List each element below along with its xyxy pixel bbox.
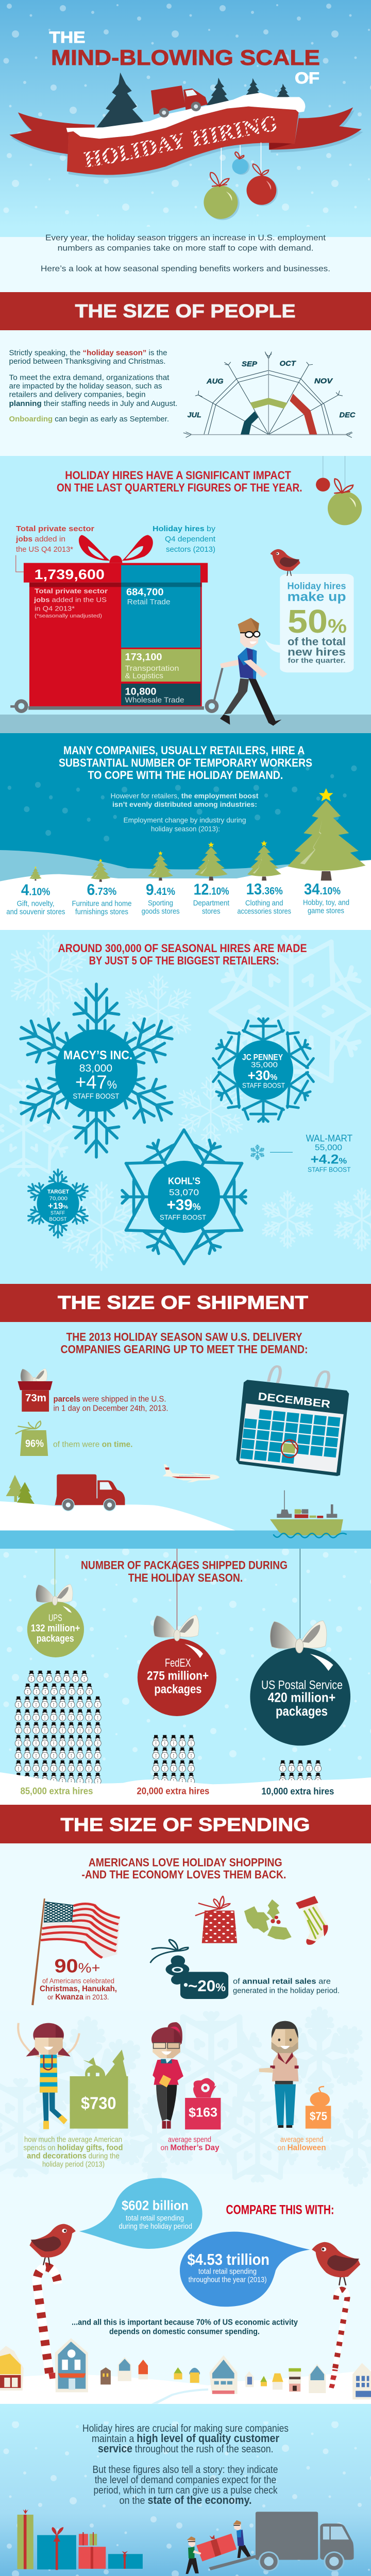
retailer: Macy's xyxy=(10,984,182,1157)
callout text: holiday hires by sector xyxy=(153,524,216,554)
callout text: holiday hires by sector: sectors (2013) xyxy=(166,545,215,554)
caption: Mother's Day: on Mother’s Day xyxy=(161,2143,220,2152)
baubles xyxy=(316,456,362,525)
text block: season definition: Strictly speaking, the “holiday season” is the xyxy=(9,349,167,357)
section banner: the size of people: THE SIZE OF PEOPLE xyxy=(75,300,296,321)
caption: Mother's Day xyxy=(161,2136,220,2152)
industry labels: stores xyxy=(202,907,221,916)
house: blue right xyxy=(352,2363,371,2399)
heading: SUBSTANTIAL NUMBER OF TEMPORARY WORKERS xyxy=(59,756,312,769)
ornament: US Postal Service: packages xyxy=(276,1703,328,1719)
snow ground xyxy=(0,1772,371,1805)
heading: BY JUST 5 OF THE BIGGEST RETAILERS: xyxy=(89,954,279,967)
text block: season definition: are impacted by the holiday season, such as xyxy=(9,382,162,391)
title xyxy=(49,28,320,87)
retailer: JC Penney xyxy=(209,1019,318,1122)
retailer: Kohl's: STAFF BOOST xyxy=(160,1213,206,1221)
industry labels: game stores xyxy=(308,907,344,916)
callout: 50 percent: Holiday hires xyxy=(288,581,346,591)
closing text: maintain a high level of quality customer xyxy=(92,2432,279,2445)
stat: total jobs: Total private sector xyxy=(35,587,108,595)
spend values: $163 xyxy=(189,2105,217,2120)
heading xyxy=(58,942,307,967)
stat: total jobs: jobs added in the US xyxy=(33,596,107,604)
speech bubble xyxy=(265,574,354,672)
retailer: JC Penney: 35,000 xyxy=(251,1061,278,1070)
industry labels: Hobby, toy, and xyxy=(303,899,349,907)
percent labels: 13.36% xyxy=(246,880,283,898)
stat: transportation: 173,100 xyxy=(125,652,162,663)
icon: polka dot gift xyxy=(195,1896,237,1943)
house: blue shop xyxy=(55,2338,88,2392)
snow ground xyxy=(0,860,371,930)
green trees xyxy=(6,1475,35,1511)
icon: green shopping bag xyxy=(15,1421,48,1456)
stat: transportation: & Logistics xyxy=(125,672,163,681)
text: on time: of them were on time. xyxy=(53,1440,133,1449)
illustration: ribbon, trees, truck and baubles xyxy=(9,73,363,220)
retailer: Kohl's: +39% xyxy=(167,1196,201,1213)
callout text: total jobs: jobs added in xyxy=(15,535,65,544)
heading xyxy=(57,469,302,494)
panel: average spending people xyxy=(0,2009,371,2184)
retailer: JC Penney: JC PENNEY xyxy=(242,1053,283,1062)
callout: 50 percent: 50% xyxy=(288,603,347,640)
heading: AMERICANS LOVE HOLIDAY SHOPPING xyxy=(89,1856,282,1869)
text block: season definition: To meet the extra demand, organizations that xyxy=(9,374,169,382)
scene: snowy village xyxy=(0,2338,371,2404)
retailer: Macy's: 83,000 xyxy=(79,1063,112,1074)
snow dots xyxy=(8,751,357,841)
panel: delivery companies xyxy=(0,1322,371,1549)
percent labels: 34.10% xyxy=(304,880,341,898)
panel: holiday season timeline xyxy=(0,330,371,456)
closing text: period, which in turn can give us a pulse check xyxy=(94,2485,278,2496)
snow ground xyxy=(0,2370,371,2404)
houses: right row xyxy=(245,2364,326,2393)
retailer: Target: TARGET xyxy=(47,1189,69,1195)
callout text: holiday hires by sector: Q4 dependent xyxy=(165,535,216,544)
stat: total jobs: in Q4 2013* xyxy=(35,605,75,613)
back hill xyxy=(0,850,371,883)
caption: holiday spend: spends on holiday gifts, food xyxy=(24,2143,123,2152)
truck xyxy=(55,1475,125,1511)
heading: ON THE LAST QUARTERLY FIGURES OF THE YEAR. xyxy=(57,481,302,494)
delivery truck xyxy=(151,86,208,117)
percent labels: 4.10% xyxy=(21,880,50,899)
stat: wholesale: Wholesale Trade xyxy=(125,696,184,704)
intro text: Here’s a look at how seasonal spending benefits workers and businesses. xyxy=(41,265,330,274)
retailer: Macy's: STAFF BOOST xyxy=(73,1092,119,1101)
background snowflakes xyxy=(0,933,371,1270)
trees xyxy=(29,788,365,882)
callout text: holiday hires by sector: Holiday hires by xyxy=(153,524,216,533)
text: 4.53 trillion: throughout the year (2013) xyxy=(189,2276,267,2284)
retailer: Macy's: MACY’S INC. xyxy=(63,1048,132,1062)
caption: holiday spend xyxy=(24,2136,123,2168)
hire counts: 20,000 extra hires xyxy=(137,1786,209,1797)
stat: 20 percent: of annual retail sales are xyxy=(233,1977,331,1986)
house: large xyxy=(209,2355,238,2394)
industry labels: Gift, novelty, xyxy=(17,899,55,908)
heading: COMPANIES GEARING UP TO MEET THE DEMAND: xyxy=(61,1343,308,1356)
gift stack xyxy=(18,2509,143,2570)
hire counts: 10,000 extra hires xyxy=(261,1786,334,1797)
icon: stocking xyxy=(296,1896,328,1945)
chart: month fan xyxy=(183,352,356,437)
caption: holiday spend: holiday period (2013) xyxy=(42,2160,105,2168)
title: OF xyxy=(295,69,319,87)
candy cane left xyxy=(37,2267,58,2401)
ornament: UPS: packages xyxy=(37,1634,74,1645)
panel: employment change by industry xyxy=(0,733,371,930)
heading: THE 2013 HOLIDAY SEASON SAW U.S. DELIVERY xyxy=(66,1331,302,1344)
stat: 90 percent: 90%+ xyxy=(55,1955,100,1976)
panel: closing statement xyxy=(0,2404,371,2576)
section banner: the size of shipment: THE SIZE OF SHIPMENT xyxy=(58,1292,308,1313)
panel: retail spending comparison xyxy=(29,2178,360,2401)
ornament: UPS: UPS xyxy=(48,1613,62,1623)
text block: season definition: period between Thanksgiving and Christmas. xyxy=(9,358,166,366)
closing text xyxy=(82,2423,289,2506)
icon: calendar: DECEMBER xyxy=(257,1391,331,1411)
text block: season definition: Onboarding can begin as early as September. xyxy=(9,415,169,423)
spend values xyxy=(81,2093,327,2123)
intro text: Every year, the holiday season triggers an increase in U.S. employment xyxy=(45,234,326,243)
heading: THE HOLIDAY SEASON. xyxy=(128,1571,243,1584)
text block: Employment change by industry during xyxy=(124,816,246,824)
scene: truck, plane, ship, snow xyxy=(0,1464,371,1549)
ground strip xyxy=(0,715,371,733)
retailer: JC Penney: STAFF BOOST xyxy=(242,1081,285,1090)
spend box: holiday xyxy=(70,2049,128,2129)
industry labels: Clothing and xyxy=(245,899,283,908)
retailer: Target xyxy=(24,1170,92,1238)
industry labels: Furniture and home xyxy=(72,899,132,908)
section banner: the size of spending xyxy=(0,1805,371,1843)
stat: 90 percent: of Americans celebrated xyxy=(42,1976,114,1985)
icon: american flag xyxy=(31,1899,120,2005)
illustration: drawn gift, baubles, person xyxy=(0,456,371,733)
bird right xyxy=(312,2242,360,2285)
pine trees xyxy=(96,73,290,128)
heading: MANY COMPANIES, USUALLY RETAILERS, HIRE A xyxy=(63,744,305,757)
text: 602 billion: during the holiday period xyxy=(119,2223,192,2231)
text: 602 billion: total retail spending xyxy=(126,2214,184,2223)
heading: compare: COMPARE THIS WITH: xyxy=(226,2202,334,2217)
industry labels xyxy=(6,899,349,916)
ornament: FedEx xyxy=(138,1615,216,1716)
hero panel xyxy=(0,0,371,274)
industry labels: furnishings stores xyxy=(75,907,128,916)
person: girl xyxy=(18,2023,79,2129)
stat: total jobs xyxy=(33,567,108,619)
spend values: $730 xyxy=(81,2093,116,2112)
closing text: Holiday hires are crucial for making sure companies xyxy=(82,2423,289,2434)
retailer: Macy's: +47% xyxy=(75,1072,117,1093)
retailer: Target: BOOST xyxy=(49,1216,67,1222)
heading: TO COPE WITH THE HOLIDAY DEMAND. xyxy=(88,769,283,782)
retailer: Target: STAFF xyxy=(50,1210,65,1216)
callout text: total jobs: Total private sector xyxy=(16,524,94,533)
stat: 20 percent: ~20% xyxy=(188,1977,226,1995)
heading xyxy=(59,744,312,782)
ribbon shadow xyxy=(11,110,363,178)
text: parcels: parcels were shipped in the U.S. xyxy=(54,1395,166,1404)
intro text: numbers as companies take on more staff to cope with demand. xyxy=(58,244,314,253)
text block: season definition: planning their staffing needs in July and August. xyxy=(9,400,177,408)
stat: retail trade xyxy=(126,587,171,606)
ornament: US Postal Service: US Postal Service xyxy=(261,1678,343,1692)
closing text: on the state of the economy. xyxy=(120,2494,251,2506)
intro text xyxy=(41,234,330,274)
panel: quarterly figures gift chart xyxy=(0,456,371,733)
pictogram: FedEx snowmen xyxy=(153,1735,195,1785)
ornament: US Postal Service xyxy=(250,1621,350,1745)
ornament: FedEx: FedEX xyxy=(165,1656,191,1669)
ornament strings xyxy=(55,1549,300,1638)
trolley xyxy=(10,668,223,713)
chart: month fan: SEP xyxy=(242,360,258,368)
spend box: Halloween xyxy=(306,2087,331,2129)
icon: red gift: 73m xyxy=(25,1393,46,1404)
retailer: Kohl's: KOHL’S xyxy=(168,1176,200,1186)
pictogram: UPS snowmen xyxy=(15,1671,101,1785)
chart: month fan: OCT xyxy=(280,359,296,367)
heading: HOLIDAY HIRES HAVE A SIGNIFICANT IMPACT xyxy=(65,469,291,482)
text: parcels xyxy=(54,1395,168,1413)
closing text: the level of demand companies expect for the xyxy=(95,2475,276,2486)
text: economic activity xyxy=(72,2318,298,2336)
stat: 90 percent xyxy=(40,1955,117,2002)
percent labels xyxy=(21,880,341,899)
section banner: the size of shipment xyxy=(0,1284,371,1322)
callout: 50 percent: for the quarter. xyxy=(288,656,345,665)
hire counts xyxy=(21,1786,334,1797)
cargo ship xyxy=(270,1490,347,1538)
retailer: Wal-Mart: 55,000 xyxy=(315,1144,342,1153)
ribbon tails xyxy=(9,107,362,154)
retailer: JC Penney: +30% xyxy=(248,1067,277,1083)
text: 602 billion: $602 billion xyxy=(122,2197,189,2213)
title: MIND-BLOWING SCALE xyxy=(51,45,320,70)
person walking xyxy=(220,618,281,726)
callout: 50 percent xyxy=(288,581,347,665)
industry labels: goods stores xyxy=(142,907,180,916)
heading: AROUND 300,000 OF SEASONAL HIRES ARE MADE xyxy=(58,942,307,955)
retailer: Wal-Mart: WAL-MART xyxy=(306,1133,352,1144)
text: economic activity: depends on domestic consumer spending. xyxy=(109,2328,260,2336)
caption: Halloween: average spend xyxy=(280,2136,323,2144)
icon: calendar xyxy=(236,1366,349,1476)
percent labels: 6.73% xyxy=(87,880,116,899)
text: parcels: in 1 day on December 24th, 2013. xyxy=(54,1404,168,1413)
ribbon front xyxy=(67,107,299,175)
bird xyxy=(270,549,300,576)
stat: total jobs: 1,739,600 xyxy=(35,567,105,582)
heading xyxy=(81,1856,286,1881)
workers carrying a box xyxy=(185,2520,251,2574)
hanging baubles xyxy=(204,143,278,220)
stat: 90 percent: Christmas, Hanukah, xyxy=(40,1985,117,1993)
bird left xyxy=(29,2224,76,2265)
icon: holly xyxy=(244,1900,292,1940)
chart: month fan: NOV xyxy=(314,377,333,385)
candy cane right xyxy=(331,2290,347,2391)
stat: wholesale xyxy=(125,686,184,704)
retailer: Target: 70,000 xyxy=(49,1195,68,1201)
chart: month fan: AUG xyxy=(206,377,224,385)
houses: small row xyxy=(100,2357,200,2384)
panel: americans love shopping xyxy=(31,1856,340,2005)
text block: isn’t evenly distributed among industries: xyxy=(112,800,257,808)
airplane xyxy=(162,1464,220,1482)
delivery truck grey xyxy=(209,2512,354,2571)
ornament: UPS: 132 million+ xyxy=(31,1623,80,1634)
ornament: FedEx: packages xyxy=(154,1683,201,1697)
snow hill xyxy=(0,1501,235,1531)
panel: biggest retailers snowflakes xyxy=(0,930,371,1286)
callout: 50 percent: new hires xyxy=(288,647,346,658)
gift bow xyxy=(79,535,153,563)
heading: -AND THE ECONOMY LOVES THEM BACK. xyxy=(81,1868,286,1881)
caption: holiday spend: and decorations during the xyxy=(27,2151,120,2160)
industry labels: and souvenir stores xyxy=(6,907,65,916)
callout: 50 percent: of the total xyxy=(288,636,346,648)
retailer: Wal-Mart: +4.2 % xyxy=(310,1152,347,1166)
person: man xyxy=(259,2021,299,2128)
text block: season definition xyxy=(9,349,177,423)
text: 4.53 trillion: $4.53 trillion xyxy=(188,2250,269,2268)
chart: month fan: JUL xyxy=(188,411,201,419)
ornament: FedEx: 275 million+ xyxy=(147,1669,209,1683)
water band xyxy=(0,1531,371,1549)
sector block: wholesale xyxy=(121,684,200,705)
retailer: Kohl's xyxy=(92,1108,276,1286)
retailer: Wal-Mart: STAFF BOOST xyxy=(308,1165,351,1173)
stat: retail trade: 684,700 xyxy=(126,587,164,598)
retailer: Kohl's: 53,070 xyxy=(169,1188,199,1197)
ornament: US Postal Service: 420 million+ xyxy=(268,1689,335,1705)
section banner: the size of people xyxy=(0,292,371,330)
closing text: But these figures also tell a story: they indicate xyxy=(93,2464,278,2476)
caption: Halloween: on Halloween xyxy=(278,2143,326,2152)
callout: 50 percent: make up xyxy=(288,590,346,604)
panel: packages shipped xyxy=(0,1549,371,1805)
ribbon lettering: HOLIDAY HIRING xyxy=(83,116,277,167)
text: 4.53 trillion: total retail spending xyxy=(198,2267,257,2276)
stat: 20 percent: generated in the holiday period. xyxy=(233,1987,340,1995)
caption: Halloween xyxy=(278,2136,326,2152)
heading xyxy=(81,1559,288,1584)
callout text: total jobs xyxy=(15,524,94,554)
text block: holiday season (2013): xyxy=(151,824,220,833)
icon: price tag ornament xyxy=(150,1940,228,1999)
bubble: holiday spending xyxy=(79,2178,203,2249)
gift lid xyxy=(24,563,208,583)
industry labels: Department xyxy=(193,899,230,908)
leader line xyxy=(16,555,24,572)
text: economic activity: ...and all this is important because 70% of US economic activity xyxy=(72,2318,298,2327)
text block xyxy=(110,791,259,833)
sector block: retail xyxy=(121,565,200,648)
person: woman xyxy=(151,2022,183,2129)
stat: wholesale: 10,800 xyxy=(125,686,157,697)
callout text: total jobs: the US Q4 2013* xyxy=(16,545,73,554)
text: 4.53 trillion xyxy=(188,2250,269,2284)
stat: total jobs: (*seasonally unadjusted) xyxy=(35,613,102,619)
spend box: Mother's Day xyxy=(185,2078,221,2129)
closing text: service throughout the rush of the season. xyxy=(98,2442,273,2455)
industry labels: Sporting xyxy=(148,899,173,908)
heading: NUMBER OF PACKAGES SHIPPED DURING xyxy=(81,1559,288,1572)
percent labels: 12.10% xyxy=(194,880,229,899)
retailer: Wal-Mart xyxy=(250,1133,352,1173)
icon: green shopping bag: 96% xyxy=(25,1438,44,1449)
bubble: annual spending xyxy=(180,2232,310,2307)
sector block: transport xyxy=(121,649,200,682)
spend values: $75 xyxy=(310,2110,327,2123)
chart: month fan: DEC xyxy=(339,411,356,419)
stat: 20 percent xyxy=(188,1977,340,1995)
industry labels: accessories stores xyxy=(237,907,291,916)
snow bank xyxy=(66,93,305,139)
stat: 90 percent: or Kwanza in 2013. xyxy=(47,1993,109,2002)
text block: However for retailers, the employment boost xyxy=(110,791,259,800)
section banner: the size of spending: THE SIZE OF SPENDING xyxy=(61,1814,310,1835)
gift body xyxy=(29,583,202,706)
ornament: UPS xyxy=(27,1584,84,1657)
heading xyxy=(61,1331,308,1356)
caption: Mother's Day: average spend xyxy=(168,2136,211,2144)
text: 602 billion xyxy=(119,2197,192,2231)
caption: holiday spend: how much the average American xyxy=(24,2136,122,2144)
candy cane bottoms xyxy=(48,2369,338,2388)
stat: retail trade: Retail Trade xyxy=(127,598,171,606)
retailer: Target: +19% xyxy=(48,1201,69,1211)
background snowflakes xyxy=(0,2009,371,2184)
percent labels: 9.41% xyxy=(146,880,175,899)
title: THE xyxy=(49,28,86,46)
stat: transportation: Transportation xyxy=(125,664,179,673)
house: yellow xyxy=(0,2346,24,2391)
pictogram: USPS snowmen xyxy=(279,1760,322,1785)
stat: transportation xyxy=(125,652,179,681)
hire counts: 85,000 extra hires xyxy=(21,1786,93,1797)
text block: season definition: retailers and delivery companies, begin xyxy=(9,391,145,399)
icon: red gift xyxy=(18,1368,53,1412)
